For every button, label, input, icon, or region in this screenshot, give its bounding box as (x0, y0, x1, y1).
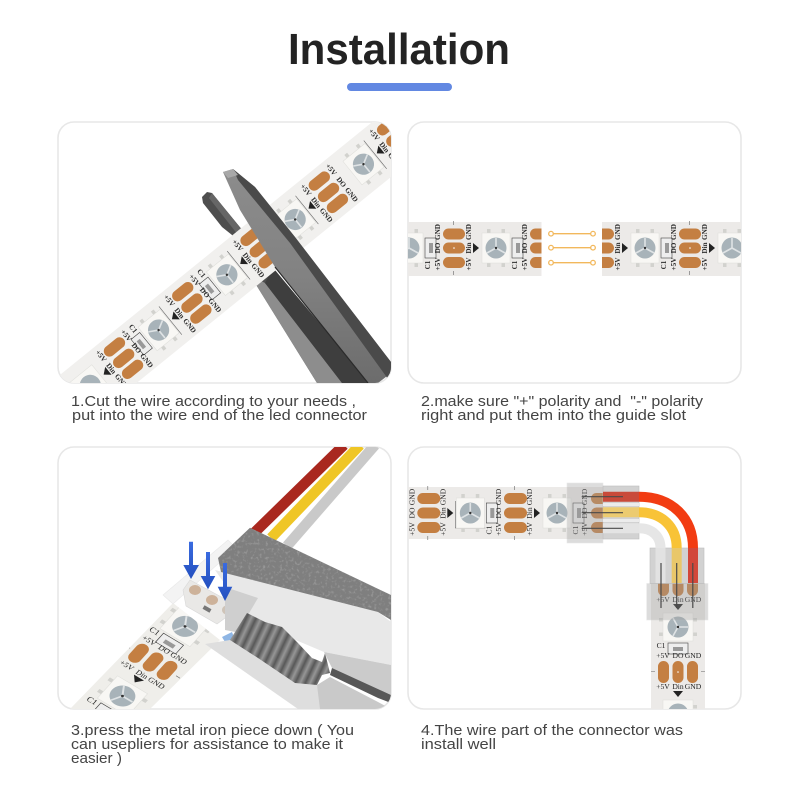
panel: step 3 press with pliers (58, 445, 391, 734)
LED strip under connector: DO (156, 643, 172, 656)
vertical LED strip: GND (685, 595, 702, 604)
LED strip, left piece: +5V (465, 257, 473, 270)
horizontal LED strip: C1 (484, 525, 493, 534)
LED strip, diagonal: C1 (127, 323, 139, 335)
vertical LED strip: +5V (656, 682, 670, 691)
LED strip, diagonal: GND (275, 241, 291, 259)
LED strip, right piece: Din (701, 242, 709, 254)
horizontal LED strip: C1 (571, 525, 580, 534)
LED strip, left piece: Din (465, 242, 473, 254)
vertical LED strip: +5V (656, 595, 670, 604)
LED strip, left piece: +5V (434, 257, 442, 270)
LED strip, diagonal: GND (249, 262, 266, 279)
horizontal LED strip: +5V (438, 522, 447, 536)
panel: step 4 installed connector (408, 447, 741, 728)
LED strip under connector: +5V (140, 634, 159, 648)
LED strip, diagonal: DO (266, 231, 280, 245)
vertical LED strip (651, 583, 705, 709)
horizontal LED strip: Din (525, 507, 534, 519)
LED strip, diagonal: DO (335, 176, 348, 189)
title underline (347, 83, 452, 91)
vertical LED strip: DO (673, 651, 684, 660)
horizontal LED strip: DO (407, 507, 416, 518)
plier lighter side face (215, 570, 391, 665)
caption: step 2: right and put them into the guide slot (421, 408, 686, 424)
LED strip, diagonal: GND (181, 317, 198, 335)
three wires (254, 445, 375, 546)
caption: step 3: easier ) (71, 751, 122, 767)
horizontal LED strip: GND (494, 488, 503, 505)
horizontal LED strip (408, 486, 614, 540)
LED strip, left piece: GND (434, 224, 442, 240)
LED strip under connector: C1 (147, 625, 162, 637)
LED strip, diagonal (60, 122, 391, 383)
horizontal LED strip: +5V (494, 522, 503, 536)
LED strip, right piece: Din (614, 242, 622, 254)
horizontal LED strip: +5V (525, 522, 534, 536)
LED strip, diagonal: DO (198, 286, 211, 300)
LED strip, diagonal: Din (173, 306, 186, 320)
LED strip, left piece: GND (521, 224, 529, 240)
LED strip, diagonal: +5V (230, 238, 245, 254)
caption: step 2: 2.make sure "+" polarity and "-" polarity (421, 394, 704, 410)
LED strip, diagonal: +5V (94, 349, 108, 364)
vertical LED strip: Din (672, 595, 684, 604)
vertical LED strip: Din (672, 682, 684, 691)
caption: step 1: put into the wire end of the led connector (72, 408, 367, 424)
LED strip, diagonal: +5V (367, 127, 382, 143)
horizontal LED strip: +5V (407, 522, 416, 536)
LED strip, diagonal: GND (411, 131, 428, 148)
LED strip, diagonal: GND (343, 186, 359, 204)
LED strip, right piece: GND (614, 224, 622, 240)
LED strip, right piece: +5V (701, 257, 709, 270)
LED strip, left piece: DO (521, 242, 529, 253)
horizontal clear connector housing (567, 483, 639, 543)
horizontal LED strip: DO (580, 507, 589, 518)
LED strip, diagonal: Din (241, 251, 254, 265)
LED strip, diagonal: +5V (392, 107, 407, 123)
LED strip, diagonal: Din (377, 141, 391, 154)
LED strip, diagonal: GND (206, 297, 223, 314)
LED strip under connector: GND (146, 675, 167, 691)
wire ends inside connectors (603, 497, 693, 583)
caption: step 3: 3.press the metal iron piece down ( You (71, 723, 354, 739)
LED strip, diagonal: DO (130, 341, 143, 355)
caption: step 3 (71, 723, 354, 767)
three coloured wires (639, 497, 693, 548)
plier top face (218, 528, 391, 620)
LED strip, right piece: +5V (670, 257, 678, 270)
LED strip, left piece: +5V (521, 257, 529, 270)
LED strip, diagonal: GND (113, 372, 129, 390)
LED strip, left piece: C1 (511, 260, 519, 269)
vertical LED strip: GND (685, 682, 702, 691)
LED strip, left piece: C1 (424, 260, 432, 269)
LED strip, left piece: DO (434, 242, 442, 253)
upper scissor blade (223, 169, 391, 383)
LED strip, diagonal: Din (309, 196, 322, 210)
caption: step 4: install well (421, 737, 496, 753)
LED strip, left piece: GND (465, 224, 473, 240)
title: Installation (288, 25, 510, 74)
LED strip, diagonal: C1 (264, 212, 276, 224)
LED strip, diagonal: Din (104, 362, 118, 376)
horizontal LED strip: GND (407, 488, 416, 505)
panel: step 2 polarity alignment (395, 122, 746, 383)
LED strip under connector: GND (168, 651, 189, 666)
plier shaded inner face (225, 587, 258, 632)
LED strip, diagonal: GND (318, 207, 334, 224)
LED strip, diagonal: +5V (119, 328, 134, 344)
LED strip, left piece (408, 221, 542, 276)
LED strip under connector (71, 604, 220, 709)
horizontal LED strip: Din (438, 507, 447, 519)
caption: step 1 (71, 394, 367, 424)
caption: step 3: can usepliers for assistance to make it (71, 737, 343, 753)
caption: step 4: 4.The wire part of the connector was (421, 723, 683, 739)
lower scissor blade (202, 192, 370, 383)
vertical clear connector housing (647, 548, 708, 620)
blue press arrows (183, 542, 232, 601)
LED strip, right piece: C1 (660, 260, 668, 269)
vertical LED strip: GND (685, 651, 702, 660)
LED strip, diagonal: +5V (187, 273, 202, 289)
panel: step 1 cut the strip (57, 121, 392, 384)
LED strip, diagonal: +5V (324, 162, 339, 178)
LED strip, diagonal: GND (386, 151, 402, 169)
connecting guide lines (549, 231, 595, 265)
clear connector housing (163, 540, 240, 642)
LED strip under connector: +5V (118, 658, 136, 673)
caption: step 1: 1.Cut the wire according to your needs , (71, 394, 356, 410)
horizontal LED strip: GND (580, 488, 589, 505)
horizontal LED strip: GND (438, 488, 447, 505)
lower plier jaw (205, 640, 322, 709)
LED strip, diagonal: DO (403, 120, 416, 134)
LED strip, diagonal: +5V (162, 293, 177, 309)
plier teeth (230, 613, 330, 685)
horizontal LED strip: DO (494, 507, 503, 518)
metal pins (582, 497, 693, 608)
plier lower tip and groove (317, 652, 391, 709)
LED strip, right piece: +5V (614, 257, 622, 270)
LED strip, diagonal: GND (138, 352, 155, 370)
LED strip, right piece (592, 221, 746, 276)
caption: step 2 (421, 394, 704, 424)
LED strip, diagonal: +5V (255, 217, 270, 233)
vertical LED strip: +5V (656, 651, 670, 660)
horizontal LED strip: +5V (580, 522, 589, 536)
LED strip, diagonal: +5V (298, 183, 313, 198)
LED strip, right piece: GND (670, 224, 678, 240)
LED strip, diagonal: C1 (195, 268, 207, 280)
horizontal LED strip: GND (525, 488, 534, 505)
LED strip, right piece: DO (670, 242, 678, 253)
caption: step 4 (421, 723, 683, 753)
LED strip, right piece: GND (701, 224, 709, 240)
LED strip under connector: Din (134, 668, 150, 681)
LED strip under connector: C1 (85, 694, 100, 707)
vertical LED strip: C1 (657, 641, 666, 650)
